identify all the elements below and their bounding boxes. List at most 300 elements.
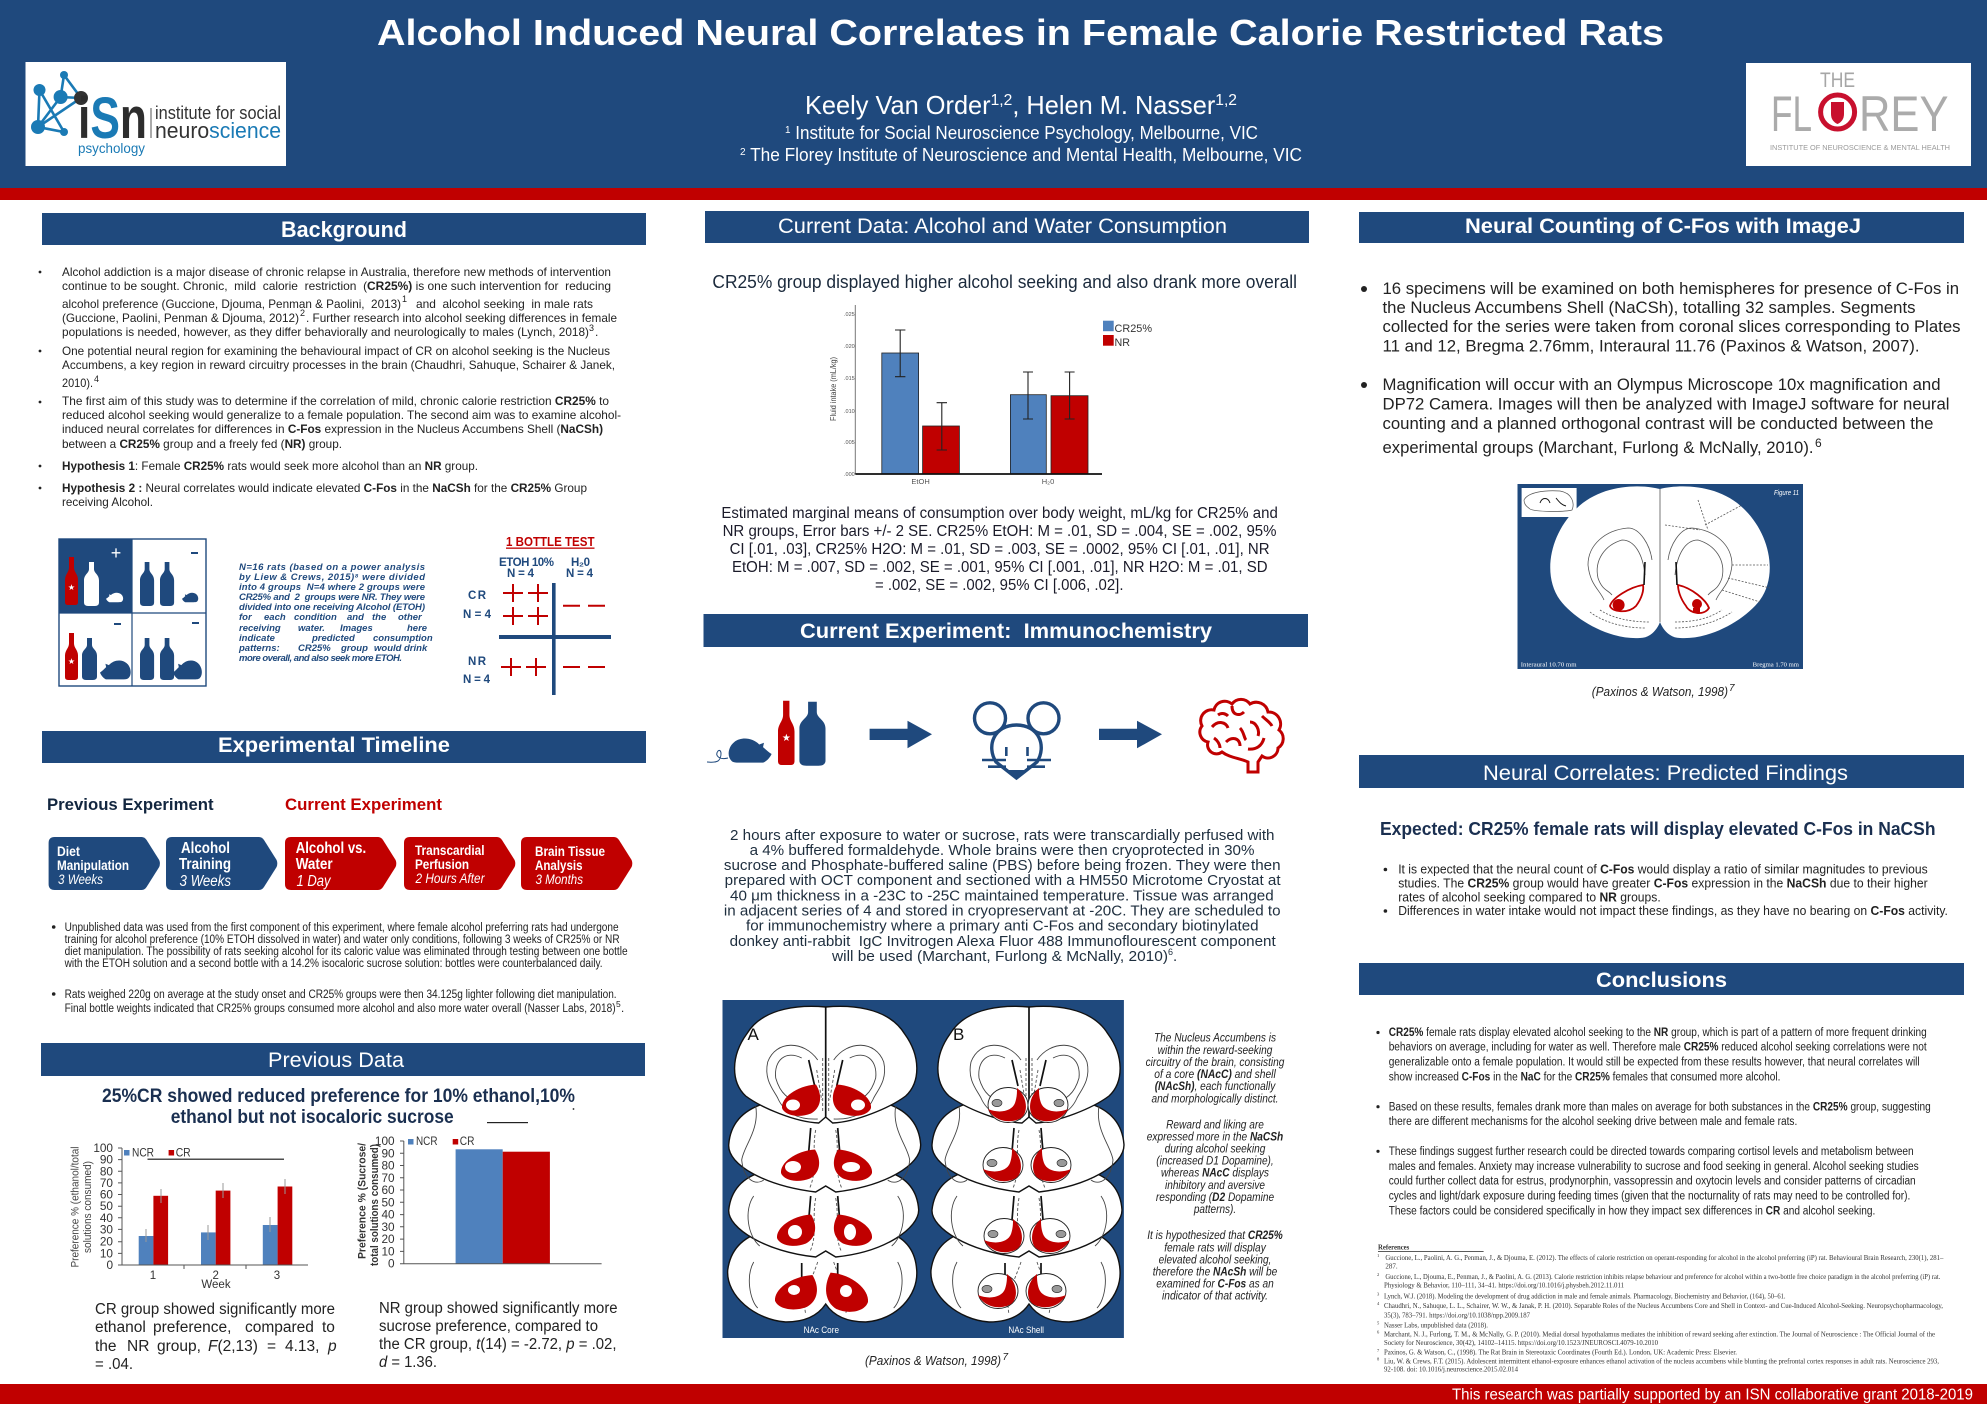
bar chart: sucrose preference: 40 <box>381 1208 395 1222</box>
timeline bullet text <box>52 922 628 1015</box>
heading: background: Background <box>281 217 407 242</box>
previous data subtitle: 25%CR showed reduced preference for 10% ethanol,10% <box>102 1086 575 1107</box>
background bullet text: 1 <box>402 294 407 304</box>
caption: ethanol result: = .04. <box>95 1356 133 1373</box>
references: 92-108. doi: 10.1016/j.neuroscience.2015.02.014 <box>1384 1365 1518 1373</box>
bar chart: ethanol preference: 20 <box>100 1235 113 1249</box>
references: 4 <box>1377 1301 1380 1306</box>
diagram caption: each <box>264 612 286 623</box>
bar chart: fluid intake: .025 <box>844 312 855 318</box>
previous data subtitle: ethanol but not isocaloric sucrose <box>171 1107 454 1128</box>
bar chart: sucrose preference: 20 <box>381 1232 395 1246</box>
conclusions bullets: could further collect data for estrus, prodynorphin, vassopressin and oxytocin levels and consider patterns of circadian <box>1389 1176 1916 1188</box>
step: transcardial perfusion: Perfusion <box>415 857 469 872</box>
bar chart: fluid intake: EtOH <box>911 477 930 486</box>
diagram: one bottle test table: N = 4 <box>463 609 492 621</box>
step: alcohol vs water: 1 Day <box>296 873 332 890</box>
bar chart: fluid intake: .005 <box>844 440 855 446</box>
heading: previous data: Previous Data <box>268 1048 404 1072</box>
bar chart: sucrose preference: Preference % (Sucrose/ <box>356 1143 368 1259</box>
icon: rat with bottles <box>707 701 826 766</box>
side note on the nucleus accumbens: inhibitory and aversive <box>1165 1180 1265 1192</box>
bar chart: ethanol preference: Week <box>201 1279 231 1291</box>
logo separator <box>150 108 152 138</box>
panel: predicted findings <box>1359 755 1964 918</box>
bottom-right group <box>140 622 202 680</box>
bar chart: ethanol preference: 3 <box>274 1270 280 1282</box>
caption: ethanol result: to <box>322 1319 335 1336</box>
diagram caption: by Liew & Crews, 2015)⁸ were divided <box>239 572 425 583</box>
timeline bullet text: diet manipulation. The possibility of rats seeking alcohol for its caloric value was eliminated through testing between one bottle <box>65 946 628 958</box>
references: Marchant, N. J., Furlong, T. M., & McNally, G. P. (2010). Medial dorsal hypothalamus mediates the inhibition of reward seeking after extinction. The Journal of Neuroscience : The Official Journal of the <box>1384 1330 1935 1338</box>
references: Nasser Labs, unpublished data (2018). <box>1384 1321 1488 1329</box>
diagram: one bottle test table: ETOH 10% <box>499 557 554 569</box>
diagram caption <box>238 562 433 664</box>
references: References <box>1378 1244 1410 1251</box>
counting bullets: Magnification will occur with an Olympus Microscope 10x magnification and <box>1382 376 1940 394</box>
chart caption <box>721 505 1278 594</box>
diagram caption: indicate <box>239 633 276 644</box>
caption: sucrose result: sucrose preference, compared to <box>379 1318 598 1335</box>
top-left group: + <box>111 543 121 563</box>
counting bullets: 11 and 12, Bregma 2.76mm, Interaural 11.76 (Paxinos & Watson, 2007). <box>1382 338 1920 356</box>
conclusions bullets: CR25% female rats display elevated alcohol seeking to the NR group, which is part of a pattern of more frequent drinking <box>1389 1027 1927 1039</box>
logo: the florey: FL <box>1771 86 1812 142</box>
footer acknowledgement: This research was partially supported by an ISN collaborative grant 2018-2019 <box>1452 1386 1973 1404</box>
step: alcohol training: Training <box>179 856 231 873</box>
inset: sagittal section <box>1522 488 1577 517</box>
side note on the nucleus accumbens: therefore the NAcSh will be <box>1153 1266 1277 1278</box>
diagram caption: divided into one receiving Alcohol (ETOH) <box>239 602 425 613</box>
background bullet text: receiving Alcohol. <box>62 495 153 509</box>
bar chart: sucrose preference: 50 <box>381 1195 395 1209</box>
bar chart: sucrose preference: 30 <box>381 1220 395 1234</box>
timeline bullet text: with the ETOH solution and a second bottle with a 14.2% isocaloric sucrose solution: bottles were counterbalanced daily. <box>64 958 603 970</box>
diagram caption: drink <box>404 643 428 654</box>
figure: nucleus accumbens brain sections: NAc Core <box>804 1325 839 1336</box>
icon: network nodes <box>31 71 88 136</box>
figure: coronal section atlas plate <box>1518 484 1803 669</box>
chart caption: = .002, SE = .002, 95% CI [.006, .02]. <box>875 577 1124 594</box>
side note on the nucleus accumbens: responding (D2 Dopamine <box>1156 1192 1274 1204</box>
bar chart: ethanol preference: 2 <box>212 1270 219 1282</box>
caption: ethanol result: the <box>95 1338 117 1355</box>
diagram caption: group <box>340 643 368 654</box>
conclusions bullets <box>1376 1027 1931 1217</box>
step: diet manipulation: 3 Weeks <box>58 872 103 887</box>
column A: NAc core <box>728 1006 921 1322</box>
side note on the nucleus accumbens: The Nucleus Accumbens is <box>1154 1033 1276 1045</box>
affiliation two: 2 <box>740 146 746 158</box>
references: Society for Neuroscience, 30(42), 14102–14115. https://doi.org/10.1523/JNEUROSCI.4079-10.2010 <box>1384 1339 1658 1347</box>
diagram: one bottle test table: 1 BOTTLE TEST <box>506 535 595 549</box>
bottom-left group: ★ <box>68 657 75 666</box>
step: brain tissue analysis: Analysis <box>535 858 582 873</box>
counting bullets: collected for the series were taken from coronal slices corresponding to Plates <box>1382 318 1960 336</box>
diagram: one bottle test table: H₂0 <box>571 557 590 569</box>
bar chart: ethanol preference: 80 <box>100 1164 113 1178</box>
procedure paragraph: prepared with OCT component and sectioned with a HM550 Microtome Cryostat at <box>725 872 1281 889</box>
arrow: to brain <box>1099 721 1162 748</box>
counting bullets: the Nucleus Accumbens Shell (NaCSh), totalling 32 samples. Segments <box>1382 299 1916 317</box>
figure: coronal section atlas plate: Interaural 10.70 mm <box>1521 662 1576 669</box>
references: 5 <box>1377 1320 1380 1326</box>
caption: ethanol result: p <box>327 1338 337 1355</box>
caption: ethanol result: (2,13) <box>217 1338 258 1355</box>
caption: ethanol result: compared <box>245 1319 314 1336</box>
heading: neural counting <box>1359 212 1964 243</box>
chart caption: CI [.01, .03], CR25% H2O: M = .01, SD = .003, SE = .0002, 95% CI [.01, .01], NR <box>730 541 1270 558</box>
conclusions bullets: These findings suggest further research could be directed towards comparing cortisol levels and metabolism between <box>1389 1146 1914 1158</box>
panel: experimental timeline <box>42 731 646 1015</box>
step: alcohol training <box>166 837 277 890</box>
references: Chaudhri, N., Sahuque, L. L., Schairer, W. W., & Janak, P. H. (2010). Separable Roles of the Nucleus Accumbens Core and Shell in Context- and Cue-Induced Alcohol-Seeking. Neuropsychopharmacology, <box>1384 1302 1943 1310</box>
diagram caption: for <box>239 612 253 623</box>
heading: current experiment: Current Experiment: Immunochemistry <box>800 619 1212 643</box>
authors: , Helen M. Nasser <box>1012 90 1216 120</box>
side note on the nucleus accumbens: circuitry of the brain, consisting <box>1146 1057 1285 1069</box>
side note on the nucleus accumbens: expressed more in the NaCSh <box>1147 1131 1283 1143</box>
references: Liu, W. & Crews, F.T. (2015). Adolescent intermittent ethanol-exposure enhances ethanol activation of the nucleus accumbens while blunting the prefrontal cortex responses in adult rats. Neuroscience 293, <box>1384 1357 1939 1365</box>
affiliation one: 1 <box>785 124 791 136</box>
bar chart: ethanol preference: 40 <box>100 1211 113 1225</box>
logo: the florey: REY <box>1859 86 1948 142</box>
bar chart: sucrose preference: 10 <box>381 1244 395 1258</box>
logo: institute for social neuroscience: neuroscience <box>155 118 281 143</box>
side note on the nucleus accumbens: during alcohol seeking <box>1165 1143 1266 1155</box>
heading: background <box>42 213 646 245</box>
caption: sucrose result: the CR group, t(14) = -2.72, p = .02, <box>379 1336 616 1353</box>
bar chart: sucrose preference: NCR <box>416 1136 438 1148</box>
icon: mouse face <box>974 703 1059 778</box>
conclusions bullets: males and females. Anxiety may increase vulnerability to sucrose and food seeking in general. Alcohol seeking studies <box>1389 1161 1919 1173</box>
background bullet text: and alcohol seeking in male rats <box>416 297 593 311</box>
conclusions bullets: there are different mechanisms for the alcohol seeking drive between male and female rats. <box>1389 1116 1797 1128</box>
top-left group <box>65 543 123 606</box>
conclusions bullets: behaviors on average, including for water as well. Therefore male CR25% reduced alcohol seeking correlations were not <box>1389 1042 1927 1054</box>
references: Guccione, L., Djouma, E., Penman, J., & Paolini, A. G. (2013). Calorie restriction inhibits relapse behaviour and preference for alcohol within a two-bottle free choice paradigm in the alcohol preferring (iP) rat. <box>1385 1273 1941 1281</box>
diagram caption: condition <box>294 612 337 623</box>
counting bullets <box>1361 280 1960 457</box>
authors: 1,2 <box>1215 92 1237 109</box>
heading: predicted findings <box>1359 755 1964 788</box>
diagram: one bottle test table <box>463 535 611 695</box>
icon: rat with bottles: ★ <box>782 733 791 744</box>
references: Lynch, W.J. (2018). Modeling the development of drug addiction in male and female animals. Pharmacology, Biochemistry and Behavior, (164), 50–61. <box>1384 1292 1786 1300</box>
procedure paragraph: 2 hours after exposure to water or sucrose, rats were transcardially perfused with <box>730 827 1274 844</box>
caption: ethanol result: group, <box>157 1338 201 1355</box>
procedure paragraph: will be used (Marchant, Furlong & McNally, 2010) <box>831 948 1168 965</box>
step: alcohol training: 3 Weeks <box>180 873 231 890</box>
arrow: to perfusion <box>870 721 932 748</box>
procedure paragraph: 6 <box>1168 947 1173 957</box>
side note on the nucleus accumbens: patterns). <box>1193 1204 1236 1216</box>
step: brain tissue analysis: 3 Months <box>536 872 583 887</box>
references: 8 <box>1377 1356 1380 1362</box>
step: alcohol vs water <box>285 837 396 890</box>
side note on the nucleus accumbens: whereas NAcC displays <box>1161 1168 1269 1180</box>
diagram: rat group grid <box>59 539 206 686</box>
conclusions bullets: cycles and light/dark exposure during feeding times (given that the nocturnality of rats may need to be controlled for). <box>1389 1191 1910 1203</box>
background bullet text: . Further research into alcohol seeking differences in female <box>306 311 617 325</box>
caption: ethanol result: = <box>267 1338 276 1355</box>
diagram: one bottle test table: N R <box>468 656 487 668</box>
step: diet manipulation: Manipulation <box>57 858 129 873</box>
figure: nucleus accumbens brain sections: NAc Shell <box>1008 1325 1044 1336</box>
background bullet text: 2010). <box>62 376 93 390</box>
diagram: one bottle test table: N = 4 <box>566 568 594 580</box>
top-right group <box>140 552 198 606</box>
heading: neural counting: Neural Counting of C-Fos with ImageJ <box>1465 214 1861 238</box>
side note on the nucleus accumbens: and morphologically distinct. <box>1152 1093 1278 1105</box>
conclusions bullets: generalizable onto a female population. It would still be expected from these results however, that neural correlates will <box>1389 1057 1920 1069</box>
bar chart: ethanol preference: 70 <box>100 1176 113 1190</box>
bar chart: ethanol preference: Preference % (ethanol/total <box>70 1146 82 1268</box>
bar chart: ethanol preference: CR <box>176 1148 191 1160</box>
panel: current data <box>705 211 1309 594</box>
icon: florey ring <box>1821 95 1855 129</box>
step: transcardial perfusion <box>404 837 515 890</box>
bar chart: sucrose preference <box>356 1134 602 1271</box>
timeline bullet text: Final bottle weights indicated that CR25% groups consumed more alcohol and also more water overall (Nasser Labs, 2018) <box>65 1003 616 1015</box>
references: 1 <box>1377 1253 1379 1258</box>
bar chart: ethanol preference <box>70 1141 308 1291</box>
procedure paragraph: 40 μm thickness in a -23C to -25C maintained temperature. Tissue was arranged <box>730 888 1274 905</box>
side note on the nucleus accumbens: Reward and liking are <box>1166 1119 1264 1131</box>
side note on the nucleus accumbens: elevated alcohol seeking, <box>1159 1254 1271 1266</box>
diagram caption: CR25% <box>298 643 331 654</box>
step: transcardial perfusion: Transcardial <box>415 843 484 858</box>
background bullet text: 2 <box>300 308 305 318</box>
references: Paxinos, G. & Watson, C., (1998). The Rat Brain in Stereotaxic Coordinates (Fourth Ed.). London, UK: Academic Press: Elsevier. <box>1384 1349 1737 1357</box>
procedure paragraph: in adjacent series of 4 and stored in cryopreservant at -20C. They are scheduled to <box>724 903 1281 920</box>
conclusions bullets: These factors could be considered specifically in how they impact sex differences in CR and alcohol seeking. <box>1389 1205 1875 1217</box>
step: brain tissue analysis: Brain Tissue <box>535 844 605 859</box>
bar chart: fluid intake <box>828 305 1152 486</box>
background bullet text: . <box>595 325 598 339</box>
caption: sucrose result: NR group showed significantly more <box>379 1300 618 1317</box>
diagram caption: N=16 rats (based on a power analysis <box>239 562 425 573</box>
timeline bullet text: Rats weighed 220g on average at the study onset and CR25% groups were then 34.125g lighter following diet manipulation. <box>65 989 617 1001</box>
bar chart: ethanol preference: 1 <box>150 1270 156 1282</box>
expected finding bullets: studies. The CR25% group would have greater C-Fos expression in the NaCSh due to their higher <box>1398 876 1928 890</box>
diagram caption: other <box>398 612 423 623</box>
bar chart: fluid intake: .010 <box>844 409 855 415</box>
side note on the nucleus accumbens: indicator of that activity. <box>1162 1290 1268 1302</box>
side note on the nucleus accumbens: (NAcSh), each functionally <box>1155 1081 1276 1093</box>
bar chart: ethanol preference: 90 <box>100 1153 113 1167</box>
bar chart: fluid intake: .020 <box>844 344 855 350</box>
affiliation one: Institute for Social Neuroscience Psychology, Melbourne, VIC <box>791 123 1258 143</box>
timeline bullet text: 5 <box>616 999 621 1009</box>
diagram caption: more overall, and also seek more ETOH. <box>239 653 402 664</box>
authors: 1,2 <box>991 92 1012 109</box>
side note on the nucleus accumbens: within the reward-seeking <box>1158 1045 1273 1057</box>
side note on the nucleus accumbens <box>1146 1033 1285 1302</box>
panel: conclusions <box>1359 963 1964 1217</box>
heading: predicted findings: Neural Correlates: Predicted Findings <box>1483 761 1848 785</box>
chart caption: Estimated marginal means of consumption over body weight, mL/kg for CR25% and <box>721 505 1278 522</box>
diagram caption: receiving <box>239 623 281 634</box>
heading: current experiment <box>704 614 1308 647</box>
timeline bullet text: Unpublished data was used from the first component of this experiment, where female alcohol preferring rats had undergone <box>65 922 619 934</box>
diagram: one bottle test table: N = 4 <box>463 674 491 686</box>
step: alcohol vs water: Water <box>296 856 333 873</box>
bar chart: ethanol preference: 10 <box>100 1246 113 1260</box>
references: 6 <box>1377 1330 1380 1334</box>
expected finding bullets: Differences in water intake would not impact these findings, as they have no bearing on C-Fos activity. <box>1398 904 1948 918</box>
logo wordmark: iSn <box>78 86 147 151</box>
procedure paragraph: sucrose and Phosphate-buffered saline (PBS) before being frozen. They were then <box>724 857 1281 874</box>
counting bullets: counting and a planned orthogonal contrast will be conducted between the <box>1382 415 1934 433</box>
references: 2 <box>1377 1272 1379 1277</box>
caption: ethanol result: CR group showed significantly more <box>95 1301 335 1318</box>
caption: ethanol result: F <box>208 1338 219 1355</box>
diagram caption: here <box>407 623 428 634</box>
logo: institute for social neuroscience <box>26 62 286 166</box>
bar chart: fluid intake: .015 <box>844 376 855 382</box>
procedure paragraph: donkey anti-rabbit IgC Invitrogen Alexa Fluor 488 Immunoflourescent component <box>730 933 1277 950</box>
chart caption: NR groups, Error bars +/- 2 SE. CR25% EtOH: M = .01, SD = .004, SE = .002, 95% <box>723 523 1277 540</box>
logo: institute for social neuroscience: psychology <box>78 140 145 156</box>
logo: the florey: THE <box>1820 69 1855 92</box>
caption: ethanol result: 4.13, <box>285 1338 319 1355</box>
references: 287. <box>1385 1263 1398 1271</box>
caption: ethanol result: preference, <box>153 1319 231 1336</box>
caption: ethanol result <box>95 1301 337 1373</box>
side note on the nucleus accumbens: of a core (NAcC) and shell <box>1154 1069 1276 1081</box>
background bullet text: The first aim of this study was to determine if the correlation of mild, chronic calorie restriction CR25% to <box>62 394 609 408</box>
bar chart: ethanol preference: 0 <box>106 1258 113 1272</box>
heading: previous data <box>41 1043 645 1076</box>
panel: previous data <box>41 1043 645 1373</box>
heading: experimental timeline: Experimental Timeline <box>218 733 450 757</box>
side note on the nucleus accumbens: female rats will display <box>1164 1242 1267 1254</box>
procedure paragraph <box>724 827 1281 965</box>
panel: neural counting <box>1359 212 1964 699</box>
diagram caption: water. <box>298 623 325 634</box>
background bullet text: continue to be sought. Chronic, mild calorie restriction (CR25%) is one such intervention for reducing <box>62 279 611 293</box>
current data subtitle: CR25% group displayed higher alcohol seeking and also drank more overall <box>712 272 1297 292</box>
bar chart: sucrose preference: 70 <box>381 1171 395 1185</box>
step: alcohol vs water: Alcohol vs. <box>296 840 366 857</box>
logo: the florey: INSTITUTE OF NEUROSCIENCE & MENTAL HEALTH <box>1770 143 1950 152</box>
background bullet text: One potential neural region for examining the behavioural impact of CR on alcohol seeking is the Nucleus <box>62 344 610 358</box>
procedure paragraph: . <box>1173 948 1177 965</box>
column B: NAc shell <box>931 1006 1124 1322</box>
counting bullets: 16 specimens will be examined on both hemispheres for presence of C-Fos in <box>1382 280 1959 298</box>
figure caption: atlas source: 7 <box>1729 683 1735 694</box>
background bullet text: Hypothesis 2 : Neural correlates would indicate elevated C-Fos in the NaCSh for the CR25% Group <box>62 481 587 495</box>
diagram: one bottle test table: N = 4 <box>507 568 535 580</box>
references: 3 <box>1377 1292 1380 1296</box>
bar chart: ethanol preference: 60 <box>100 1188 113 1202</box>
panel: background <box>39 213 646 695</box>
step: transcardial perfusion: 2 Hours After <box>415 871 485 886</box>
bar chart: fluid intake: H₂0 <box>1042 477 1054 486</box>
counting bullets: experimental groups (Marchant, Furlong & McNally, 2010). <box>1382 439 1814 457</box>
authors: Keely Van Order <box>805 90 995 120</box>
bar chart: sucrose preference: CR <box>460 1136 474 1148</box>
side note on the nucleus accumbens: It is hypothesized that CR25% <box>1147 1230 1283 1242</box>
red header rule <box>0 188 1987 200</box>
bar chart: ethanol preference: solutions consumed) <box>82 1161 94 1253</box>
references: 35(3), 783–791. https://doi.org/10.1038/npp.2009.187 <box>1384 1311 1530 1319</box>
bar chart: ethanol preference: 100 <box>93 1141 113 1155</box>
step: diet manipulation <box>49 837 160 890</box>
heading: experimental timeline <box>42 731 646 763</box>
bar chart: sucrose preference: total solutions consumed) <box>369 1144 381 1266</box>
step: diet manipulation: Diet <box>57 844 80 859</box>
logo: the florey <box>1746 63 1971 166</box>
title: Alcohol Induced Neural Correlates in Female Calorie Restricted Rats <box>377 12 1664 53</box>
background bullet text: populations is needed, however, as they differ behaviorally and neurologically to males (Lynch, 2018) <box>62 325 589 339</box>
bar chart: sucrose preference: 0 <box>388 1257 395 1271</box>
label: current experiment: Current Experiment <box>285 796 443 814</box>
diagram caption: patterns: <box>238 643 280 654</box>
figure: coronal section atlas plate: Bregma 1.70 mm <box>1753 662 1799 669</box>
background bullet text: Accumbens, a key region in reward circuitry processes in the brain (Chaudhri, Sahuque, Schairer & Janek, <box>62 358 615 372</box>
bar chart: sucrose preference: 90 <box>381 1146 395 1160</box>
caption: ethanol result: ethanol <box>95 1319 146 1336</box>
caption: ethanol result: NR <box>127 1338 149 1355</box>
figure caption: Paxinos and Watson: 7 <box>1002 1352 1008 1363</box>
bar chart: fluid intake: Fluid intake (mL/kg) <box>828 357 838 421</box>
diagram caption: predicted <box>311 633 355 644</box>
diagram caption: Images <box>340 623 373 634</box>
diagram caption: and <box>347 612 364 623</box>
figure: nucleus accumbens brain sections: B <box>953 1025 964 1044</box>
top-left group: ★ <box>68 583 75 592</box>
header band <box>0 0 1987 200</box>
bar chart: ethanol preference: 50 <box>100 1199 113 1213</box>
caption: sucrose result: d = 1.36. <box>379 1354 437 1371</box>
timeline bullet text: . <box>621 1003 624 1015</box>
expected finding bullets <box>1384 862 1948 918</box>
diagram caption: into 4 groups N=4 where 2 groups were <box>239 582 426 593</box>
affiliation two: The Florey Institute of Neuroscience and Mental Health, Melbourne, VIC <box>746 145 1302 165</box>
step: alcohol training: Alcohol <box>181 840 230 857</box>
previous data subtitle <box>102 1086 575 1128</box>
background bullet text: Alcohol addiction is a major disease of chronic relapse in Australia, therefore new methods of intervention <box>62 265 611 279</box>
background bullet text: between a CR25% group and a freely fed (NR) group. <box>62 437 342 451</box>
panel: current experiment <box>704 614 1308 1368</box>
bar chart: ethanol preference: 30 <box>100 1222 113 1236</box>
background bullet text: 4 <box>94 374 99 384</box>
step: brain tissue analysis <box>521 837 632 890</box>
bar chart: fluid intake: NR <box>1114 337 1130 349</box>
references: Guccione, L., Paolini, A. G., Penman, J., & Djouma, E. (2012). The effects of calorie restriction on operant-responding for alcohol in the alcohol preferring (iP) rat. Behavioural Brain Research, 230(1), 281– <box>1385 1254 1944 1262</box>
counting bullets: DP72 Camera. Images will then be analyzed with ImageJ software for neural <box>1382 396 1950 414</box>
diagram caption: CR25% and 2 groups were NR. They were <box>239 592 426 603</box>
conclusions bullets: show increased C-Fos in the NaC for the CR25% females that consumed more alcohol. <box>1389 1071 1780 1083</box>
diagram caption: consumption <box>373 633 433 644</box>
procedure paragraph: for immunochemistry where a primary anti C-Fos and secondary biotinylated <box>746 918 1259 935</box>
heading: current data <box>705 211 1309 243</box>
chart caption: EtOH: M = .007, SD = .002, SE = .001, 95% CI [.001, .01], NR H2O: M = .01, SD <box>732 559 1268 576</box>
background bullet text <box>39 265 621 509</box>
bar chart: fluid intake: CR25% <box>1114 323 1152 335</box>
logo text lines: institute for social <box>155 103 281 123</box>
timeline bullet text: training for alcohol preference (10% ETOH dissolved in water) and water only conditions, following 3 weeks of CR25% or NR <box>65 934 620 946</box>
expected finding bullets: It is expected that the neural count of C-Fos would display a ratio of similar magnitudes to previous <box>1398 862 1928 876</box>
caption: sucrose result <box>379 1300 618 1371</box>
diagram caption: the <box>372 612 387 623</box>
references: Physiology & Behavior, 110–111, 34–41. https://doi.org/10.1016/j.physbeh.2012.11.011 <box>1384 1282 1624 1290</box>
bar chart: sucrose preference: 60 <box>381 1183 395 1197</box>
heading: current data: Current Data: Alcohol and Water Consumption <box>778 214 1227 238</box>
footer band <box>0 1384 1987 1404</box>
